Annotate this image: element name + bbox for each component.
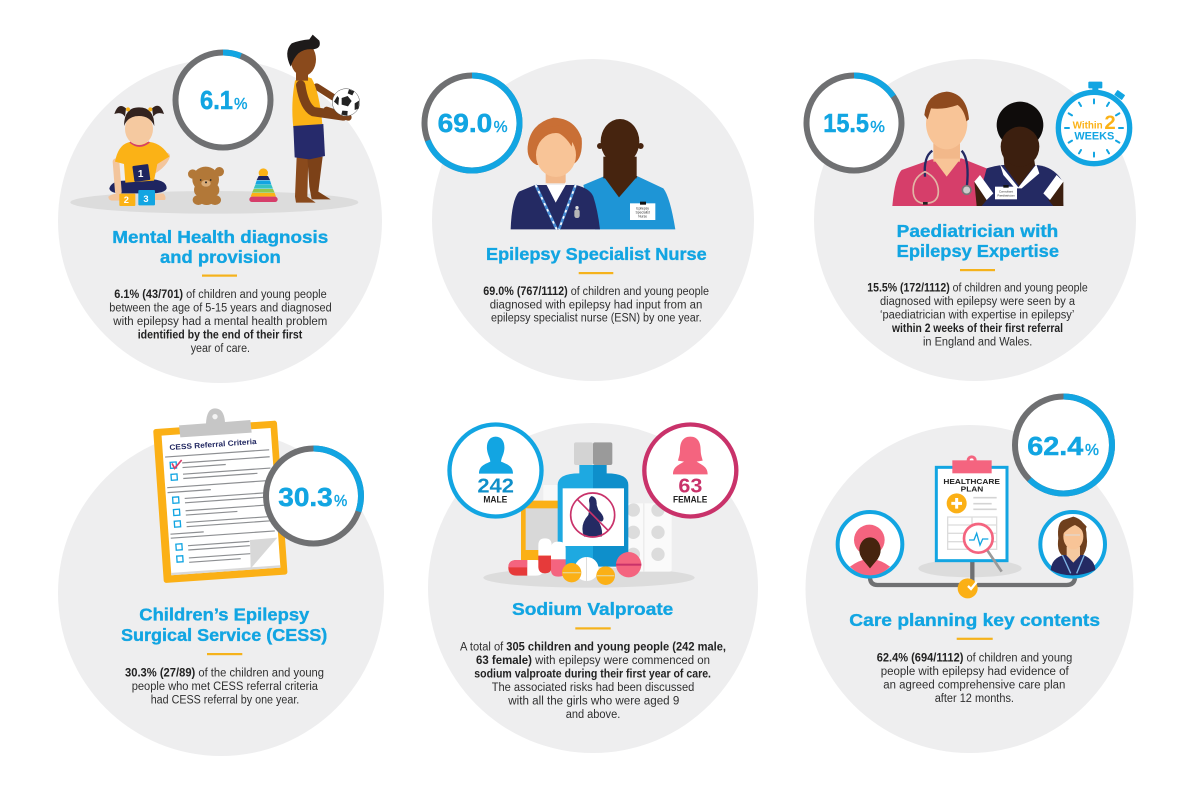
illustration: medicines (483, 442, 695, 588)
icon: stopwatch within 2 weeks (1058, 82, 1130, 164)
text: care planning description: an agreed comprehensive care plan (883, 680, 1065, 692)
heading: CESS: Children’s Epilepsy (139, 605, 310, 625)
text: CESS description (125, 668, 324, 706)
text: mental health description: between the age of 5-15 years and diagnosed (109, 302, 332, 314)
text: valproate description: with all the girls who were aged 9 (507, 696, 679, 708)
heading: CESS: Surgical Service (CESS) (121, 625, 327, 645)
ring: 15.5 percent: % (870, 119, 885, 136)
icon: healthcare plan clipboard: PLAN (961, 485, 984, 494)
illustration: referral clipboard: CESS Referral Criteria (169, 437, 258, 452)
text: valproate description: The associated risks had been discussed (492, 682, 694, 694)
heading: CESS (121, 605, 327, 645)
illustration: two nurses: Specialist (636, 210, 650, 214)
heading: mental health: Mental Health diagnosis (112, 227, 329, 247)
text: CESS description: 30.3% (27/89) of the children and young (125, 668, 324, 680)
illustration: doctor and nurse: Paediatrician (997, 193, 1015, 197)
text: mental health description (109, 289, 332, 355)
heading: sodium valproate: Sodium Valproate (512, 599, 674, 619)
text: valproate description (460, 642, 726, 721)
icon: stopwatch within 2 weeks: WEEKS (1074, 130, 1114, 142)
text: valproate description: A total of 305 children and young people (242 male, (460, 642, 726, 654)
panel: CESS (58, 408, 384, 756)
text: mental health description: with epilepsy had a mental health problem (112, 316, 327, 328)
ring: 69.0 percent (424, 76, 520, 170)
callout: female count: FEMALE (673, 495, 707, 505)
heading: epilepsy specialist nurse: Epilepsy Specialist Nurse (486, 244, 707, 264)
illustration: children playing: 2 (124, 195, 129, 205)
illustration: children playing: 1 (138, 169, 144, 180)
heading: mental health (112, 227, 329, 267)
text: valproate description: sodium valproate during their first year of care. (474, 668, 711, 680)
icon: stopwatch within 2 weeks: Within (1073, 121, 1103, 132)
ring: 62.4 percent (1015, 396, 1112, 494)
heading: care planning: Care planning key contents (849, 610, 1100, 630)
panel: care planning (806, 396, 1134, 753)
text: paediatrician description: in England and Wales. (923, 336, 1032, 348)
callout: female count (644, 424, 736, 516)
text: paediatrician description (867, 282, 1088, 348)
callout: male count: MALE (483, 495, 507, 505)
text: mental health description: 6.1% (43/701) of children and young people (114, 289, 327, 301)
ring: 6.1 percent: 6.1 (200, 87, 233, 115)
ring: 62.4 percent: % (1085, 442, 1099, 459)
heading: paediatrician (897, 221, 1059, 261)
illustration: children playing: 3 (143, 194, 149, 204)
text: paediatrician description: within 2 weeks of their first referral (891, 323, 1063, 335)
illustration: doctor and nurse (892, 92, 1063, 206)
callout: female count: 63 (678, 476, 702, 498)
ring: 15.5 percent: 15.5 (823, 110, 869, 138)
panel: sodium valproate (428, 423, 758, 753)
illustration: referral clipboard (153, 408, 288, 583)
text: nurse description: 69.0% (767/1112) of children and young people (483, 286, 709, 298)
icon: stopwatch within 2 weeks: 2 (1104, 113, 1116, 134)
text: nurse description: epilepsy specialist nurse (ESN) by one year. (491, 313, 702, 325)
callout: male count: 242 (477, 476, 514, 498)
text: care planning description: people with epilepsy had evidence of (881, 666, 1070, 678)
text: valproate description: and above. (566, 709, 620, 721)
text: care planning description: 62.4% (694/1112) of children and young (877, 653, 1072, 665)
icon: nurse portrait (1040, 512, 1105, 577)
ring: 69.0 percent: 69.0 (438, 110, 492, 138)
illustration: doctor and nurse: Consultant (999, 190, 1013, 194)
heading: mental health: and provision (160, 247, 281, 267)
panel: epilepsy specialist nurse (424, 59, 754, 381)
ring: 30.3 percent (266, 448, 361, 544)
panel: paediatrician (806, 59, 1136, 381)
text: nurse description (483, 286, 709, 325)
icon: healthcare plan clipboard (936, 455, 1007, 572)
illustration: two nurses: Epilepsy (636, 206, 649, 210)
icon: healthcare plan clipboard: HEALTHCARE (943, 477, 1000, 486)
ring: 6.1 percent: % (234, 96, 248, 113)
ring: 30.3 percent: 30.3 (278, 484, 333, 512)
ring: 62.4 percent: 62.4 (1027, 433, 1084, 461)
panel: mental health (58, 35, 382, 383)
text: valproate description: 63 female) with epilepsy were commenced on (476, 655, 710, 667)
illustration: healthcare plan network (838, 455, 1105, 598)
text: paediatrician description: 15.5% (172/1112) of children and young people (867, 282, 1088, 294)
heading: paediatrician: Epilepsy Expertise (897, 241, 1059, 261)
illustration: two nurses (511, 118, 675, 229)
text: mental health description: identified by the end of their first (138, 330, 302, 342)
illustration: two nurses: Nurse (638, 214, 647, 218)
text: care planning description (877, 653, 1072, 705)
text: mental health description: year of care. (191, 343, 250, 355)
text: CESS description: people who met CESS referral criteria (132, 681, 319, 693)
illustration: children playing (70, 35, 360, 214)
text: care planning description: after 12 months. (935, 693, 1014, 705)
text: CESS description: had CESS referral by one year. (151, 694, 299, 706)
ring: 15.5 percent (806, 76, 902, 170)
icon: approval check (958, 578, 978, 598)
text: nurse description: diagnosed with epilepsy had input from an (490, 299, 702, 311)
ring: 6.1 percent (176, 52, 270, 148)
text: paediatrician description: diagnosed with epilepsy were seen by a (880, 296, 1076, 308)
text: paediatrician description: ‘paediatrician with expertise in epilepsy’ (880, 310, 1074, 322)
callout: male count (449, 424, 541, 516)
icon: patient portrait (838, 512, 902, 577)
ring: 69.0 percent: % (494, 119, 508, 136)
heading: paediatrician: Paediatrician with (897, 221, 1058, 241)
ring: 30.3 percent: % (334, 493, 347, 510)
